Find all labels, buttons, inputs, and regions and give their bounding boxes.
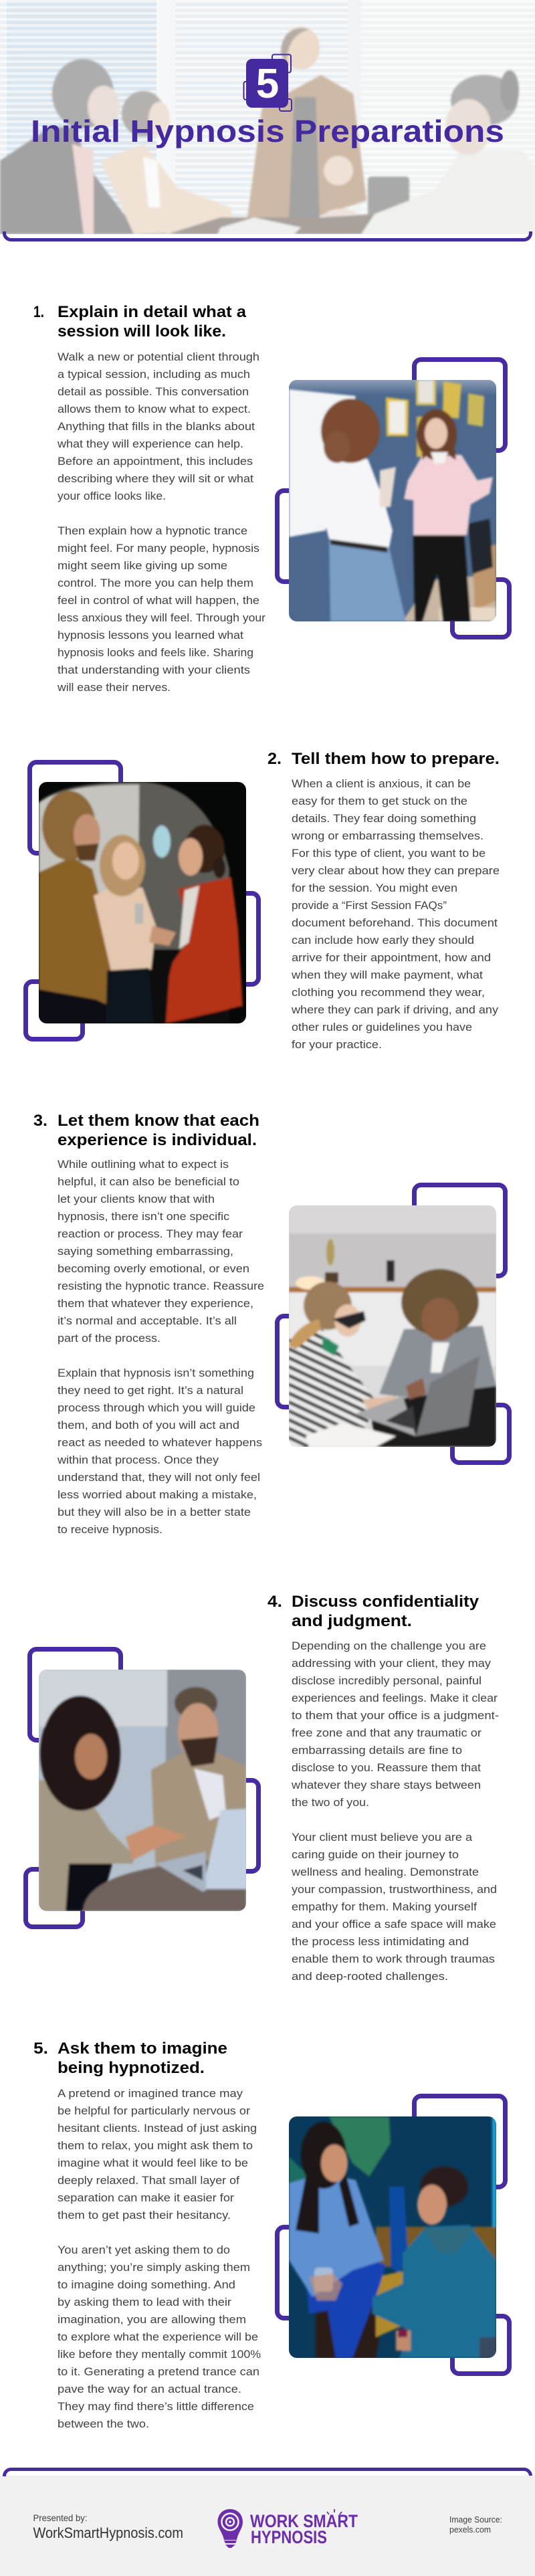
body text 4: Depending on the challenge you are [292, 1640, 486, 1652]
middle woman [94, 886, 156, 971]
logo: Work Smart Hypnosis [218, 2509, 358, 2548]
body text 4: free zone and that any traumatic or [292, 1727, 482, 1739]
body text 4: and your office a safe space will make [292, 1918, 496, 1930]
wordmark [250, 2509, 358, 2547]
body text 2: document beforehand. This document [292, 917, 498, 929]
body text 4 [291, 1640, 499, 1983]
heading 4: 4. [268, 1593, 282, 1611]
image source [449, 2514, 502, 2535]
body text 1: might feel. For many people, hypnosis [58, 542, 259, 555]
body text 3: less worried about making a mistake, [58, 1489, 257, 1501]
section 2 [25, 750, 500, 1051]
body text 3: saying something embarrassing, [58, 1246, 233, 1258]
photo frame accents 4 [25, 1650, 258, 1926]
chair [368, 177, 409, 217]
body text 5: to explore what the experience will be [58, 2331, 258, 2343]
man [39, 858, 112, 1006]
right woman [372, 2225, 496, 2358]
photo 3: two women at a laptop in a kitchen [289, 1205, 496, 1447]
body text 2: When a client is anxious, it can be [292, 778, 471, 790]
body text 5: them to get past their hesitancy. [58, 2209, 231, 2221]
heading 1: Explain in detail what a [58, 303, 247, 321]
wordmark: HYPNOSIS [251, 2527, 327, 2547]
wordmark: WORK SMART [250, 2511, 358, 2531]
footer top rule [4, 2470, 531, 2476]
header bottom rule [4, 231, 531, 239]
man [151, 1753, 246, 1870]
body text 4: to them that your office is a judgment- [292, 1710, 499, 1722]
right man [353, 151, 535, 234]
body text 1: will ease their nerves. [57, 682, 171, 694]
left woman shirt [289, 2173, 384, 2297]
body text 3: hypnosis, there isn’t one specific [58, 1211, 229, 1223]
heading 5: 5. [33, 2040, 48, 2058]
body text 2: when they will make payment, what [291, 969, 483, 981]
body text 1: feel in control of what will happen, the [58, 595, 259, 607]
presented by: Presented by: [33, 2512, 87, 2523]
back woman [329, 540, 406, 621]
photo 4: woman and man at a laptop [39, 1670, 246, 1911]
body text 1: Walk a new or potential client through [58, 351, 259, 363]
woman [39, 1780, 136, 1911]
heading 3: 3. [33, 1112, 47, 1130]
body text 1: might seem like giving up some [58, 560, 227, 572]
body text 5: pave the way for an actual trance. [58, 2383, 241, 2395]
presented by [33, 2512, 183, 2541]
photo 1: two women talking in an office [289, 380, 496, 621]
heading 3: Let them know that each [58, 1112, 259, 1130]
body text 1: that understanding with your clients [58, 664, 250, 676]
body text 2: wrong or embarrassing themselves. [291, 830, 484, 842]
body text 2: for your practice. [292, 1039, 382, 1051]
body text 4: experiences and feelings. Make it clear [292, 1692, 498, 1704]
body text 2: easy for them to get stuck on the [292, 795, 467, 807]
body text 5: anything; you’re simply asking them [58, 2262, 250, 2274]
body text 2: for the session. You might even [292, 882, 457, 894]
body text 2: very clear about how they can prepare [292, 865, 500, 877]
body text 3: becoming overly emotional, or even [58, 1263, 249, 1275]
body text 4: the two of you. [292, 1797, 369, 1809]
photo 5: two smiling women in blue on a sofa [289, 2116, 496, 2358]
footer panel [0, 2470, 535, 2576]
table [369, 1386, 496, 1447]
title badge: number 5 [243, 55, 292, 111]
table [167, 214, 374, 234]
body text 1: a typical session, including as much [58, 369, 250, 381]
photo frame accents 5 [277, 2096, 510, 2373]
body text 1: Before an appointment, this includes [58, 456, 253, 468]
body text 2: can include how early they should [292, 934, 474, 947]
body text 4: embarrassing details are fine to [292, 1745, 462, 1757]
body text 3 [57, 1159, 264, 1536]
body text 5: to imagine doing something. And [58, 2279, 235, 2291]
body text 5: They may find there’s little difference [58, 2401, 254, 2413]
body text 3: to receive hypnosis. [58, 1524, 163, 1536]
body text 5: A pretend or imagined trance may [58, 2088, 243, 2100]
heading 1: 1. [33, 303, 44, 321]
body text 5: by asking them to lead with their [58, 2296, 232, 2308]
table [83, 1858, 246, 1911]
section 1 [33, 303, 510, 694]
heading 1: session will look like. [58, 322, 226, 340]
photo frame accents 3 [277, 1185, 510, 1462]
body text 2 [291, 778, 500, 1051]
body text 4: caring guide on their journey to [292, 1849, 459, 1861]
left woman trousers [306, 2254, 386, 2358]
body text 3: them that whatever they experience, [58, 1298, 253, 1310]
icon: spiral light bulb [218, 2509, 243, 2548]
body text 5: them to relax, you might ask them to [58, 2140, 253, 2152]
front woman [413, 534, 471, 621]
body text 2: arrive for their appointment, how and [292, 952, 491, 964]
body text 3: part of the process. [58, 1332, 160, 1345]
body text 5: imagine what it would feel like to be [58, 2157, 248, 2169]
body text 1: Anything that fills in the blanks about [58, 421, 255, 433]
title: Initial Hypnosis Preparations [31, 114, 504, 148]
body text 3: process through which you will guide [58, 1402, 255, 1414]
body text 2: where they can park if driving, and any [291, 1004, 499, 1016]
heading 4: and judgment. [292, 1612, 412, 1630]
laptop [354, 1396, 416, 1436]
heading 5: Ask them to imagine [58, 2040, 227, 2058]
body text 3: them, and both of you will act and [58, 1419, 239, 1431]
heading 4 [268, 1593, 479, 1630]
heading 3 [33, 1112, 259, 1149]
body text 3: but they will also be in a better state [58, 1506, 251, 1518]
body text 1: what they will experience can help. [57, 438, 243, 450]
body text 1: hypnosis lessons you learned what [58, 629, 243, 641]
body text 5: like before they mentally commit 100% [58, 2349, 261, 2361]
right woman [166, 877, 243, 1023]
body text 5: hesitant clients. Instead of just asking [58, 2122, 257, 2135]
body text 1: describing where they will sit or what [58, 473, 253, 485]
body text 4: wellness and healing. Demonstrate [291, 1866, 479, 1878]
body text 4: disclose incredibly personal, painful [292, 1675, 481, 1687]
body text 5: to it. Generating a pretend trance can [58, 2366, 259, 2378]
body text 3: react as needed to whatever happens [58, 1437, 262, 1449]
body text 4: Your client must believe you are a [292, 1831, 473, 1844]
body text 3: resisting the hypnotic trance. Reassure [58, 1280, 264, 1292]
body text 2: For this type of client, you want to be [292, 848, 486, 860]
body text 3: understand that, they will not only feel [58, 1472, 260, 1484]
body text 2: details. They fear doing something [292, 813, 476, 825]
left man [0, 127, 167, 234]
body text 5: be helpful for particularly nervous or [58, 2105, 251, 2117]
presented by: WorkSmartHypnosis.com [33, 2524, 183, 2541]
body text 5 [58, 2088, 261, 2430]
body text 4: enable them to work through traumas [292, 1953, 495, 1965]
section 3 [33, 1112, 510, 1536]
body text 2: provide a “First Session FAQs” [292, 900, 447, 912]
body text 2: clothing you recommend they wear, [292, 987, 485, 999]
body text 3: let your clients know that with [58, 1193, 215, 1205]
body text 3: helpful, it can also be beneficial to [58, 1176, 239, 1188]
notebook [306, 1423, 396, 1447]
heading 5: being hypnotized. [58, 2059, 205, 2077]
body text 3: it’s normal and acceptable. It’s all [58, 1315, 237, 1327]
body text 3: reaction or process. They may fear [58, 1228, 243, 1240]
header photo: meeting around a table [0, 0, 535, 234]
photo frame accents 1 [277, 360, 510, 637]
body text 1: your office looks like. [58, 490, 166, 502]
body text 3: While outlining what to expect is [58, 1159, 229, 1171]
body text 5: separation can make it easier for [58, 2192, 235, 2204]
photo frame accents 2 [25, 763, 258, 1039]
image source: pexels.com [449, 2524, 491, 2535]
body text 4: your compassion, trustworthiness, and [292, 1884, 497, 1896]
body text 5: imagination, you are allowing them [58, 2314, 246, 2326]
section 5 [33, 2040, 510, 2430]
photo 2: three people talking in a dim room [39, 782, 246, 1023]
body text 1: allows them to know what to expect. [58, 403, 251, 415]
body text 4: disclose to you. Reassure them that [292, 1762, 481, 1774]
body text 5: You aren’t yet asking them to do [58, 2244, 230, 2256]
body text 5: deeply relaxed. That small layer of [58, 2175, 239, 2187]
heading 2: Tell them how to prepare. [292, 750, 500, 768]
image source: Image Source: [449, 2514, 502, 2524]
heading 4: Discuss confidentiality [292, 1593, 479, 1611]
standing woman [247, 75, 366, 217]
body text 4: and deep-rooted challenges. [292, 1971, 448, 1983]
body text 3: they need to get right. It’s a natural [58, 1385, 243, 1397]
body text 1: control. The more you can help them [58, 577, 253, 589]
body text 4: addressing with your client, they may [292, 1658, 492, 1670]
body text 3: within that process. Once they [57, 1454, 219, 1466]
body text 4: empathy for them. Making yourself [292, 1901, 477, 1913]
right woman [379, 1326, 496, 1409]
body text 1: less anxious they will feel. Through your [58, 612, 266, 624]
body text 4: whatever they share stays between [291, 1779, 481, 1791]
heading 3: experience is individual. [58, 1131, 257, 1149]
body text 1: hypnosis looks and feels like. Sharing [58, 647, 253, 659]
body text 4: the process less intimidating and [292, 1936, 469, 1948]
heading 1 [33, 303, 247, 340]
body text 2: other rules or guidelines you have [292, 1021, 472, 1033]
heading 2: 2. [268, 750, 282, 768]
section 4 [25, 1593, 499, 1983]
body text 1 [57, 351, 266, 694]
second woman [100, 144, 234, 234]
body text 1: detail as possible. This conversation [58, 386, 249, 398]
body text 3: Explain that hypnosis isn’t something [58, 1367, 254, 1379]
title badge: number 5: 5 [256, 61, 279, 107]
laptop [203, 1809, 246, 1889]
body text 5: between the two. [58, 2418, 149, 2430]
left woman [289, 1329, 377, 1447]
heading 5 [33, 2040, 227, 2077]
body text 1: Then explain how a hypnotic trance [58, 525, 247, 537]
